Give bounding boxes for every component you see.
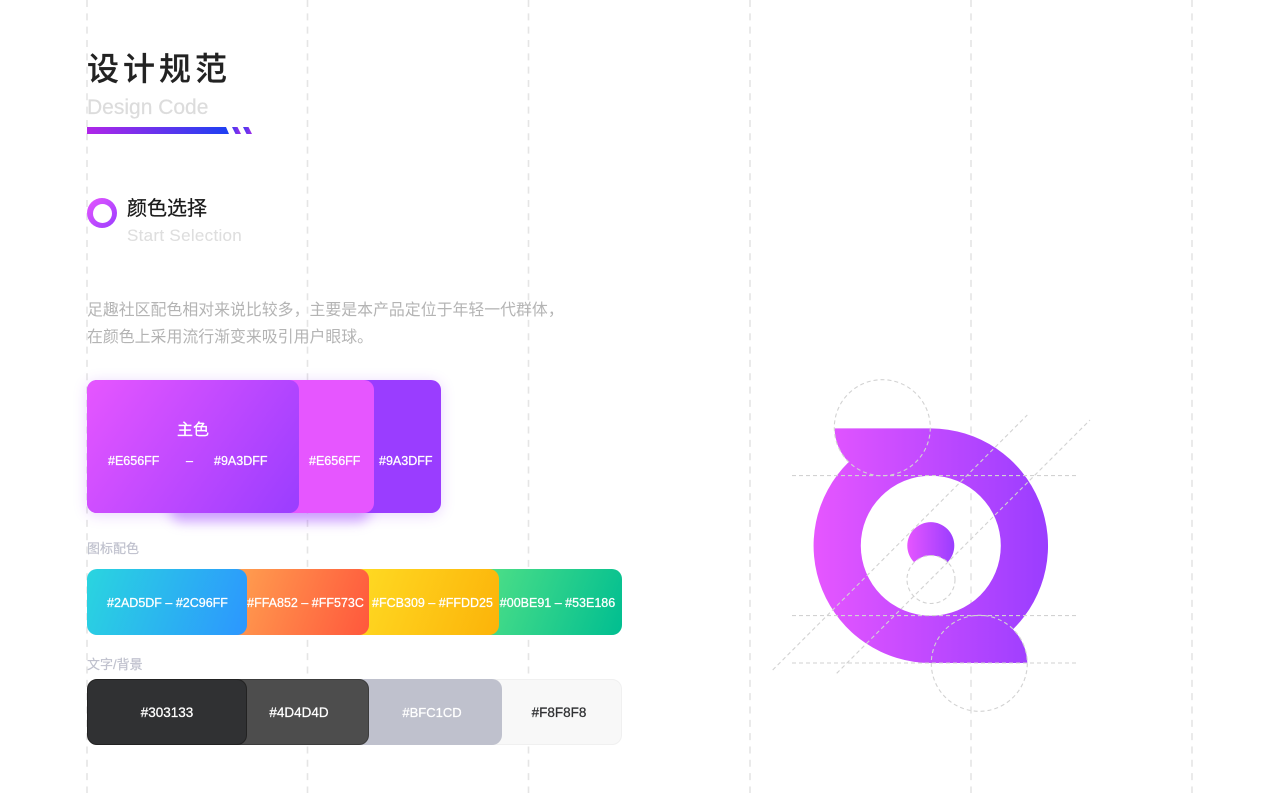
icon: section ring — [87, 198, 117, 228]
panel: text and background colours — [87, 679, 622, 745]
light swatch — [477, 679, 622, 745]
icon colours heading: 图标配色 — [87, 541, 139, 556]
purple swatch — [87, 380, 441, 513]
panel: icon colours — [87, 569, 622, 635]
title: 设计规范 — [87, 51, 231, 87]
description text: 在颜色上采用流行渐变来吸引用户眼球。 — [87, 329, 373, 346]
label: green: #00BE91 – #53E186 — [500, 596, 615, 610]
blue swatch — [87, 569, 247, 635]
orange swatch — [217, 569, 369, 635]
text and background heading: 文字/背景 — [87, 657, 143, 672]
description text: 足趣社区配色相对来说比较多，主要是本产品定位于年轻一代群体， — [87, 302, 564, 319]
label: gradient start: #E656FF — [108, 454, 159, 468]
label: magenta: #E656FF — [309, 454, 360, 468]
label: dark: #303133 — [141, 705, 193, 720]
dark swatch — [87, 679, 247, 745]
label: mid dark: #4D4D4D — [269, 705, 329, 720]
mid dark swatch — [217, 679, 369, 745]
gradient swatch — [87, 380, 299, 513]
label: grey: #BFC1CD — [402, 705, 462, 720]
green swatch — [477, 569, 622, 635]
label: light: #F8F8F8 — [532, 705, 586, 720]
construction guides — [773, 380, 1090, 711]
panel: main colour — [81, 376, 447, 521]
section subheading: Start Selection — [127, 226, 242, 245]
label: yellow: #FCB309 – #FFDD25 — [372, 596, 493, 610]
section heading: 颜色选择 — [127, 198, 207, 220]
label: blue: #2AD5DF – #2C96FF — [107, 596, 228, 610]
grey swatch — [347, 679, 502, 745]
label: orange: #FFA852 – #FF573C — [247, 596, 364, 610]
label: dash: – — [186, 454, 193, 468]
magenta swatch — [87, 380, 374, 513]
description text — [87, 301, 564, 346]
yellow swatch — [347, 569, 499, 635]
main colour glow — [170, 498, 370, 522]
logo mark — [814, 428, 1048, 663]
subtitle: Design Code — [87, 96, 208, 119]
label: main colour: 主色 — [177, 422, 209, 439]
label: gradient end: #9A3DFF — [214, 454, 268, 468]
label: purple: #9A3DFF — [379, 454, 432, 468]
title accent bar — [87, 127, 252, 134]
